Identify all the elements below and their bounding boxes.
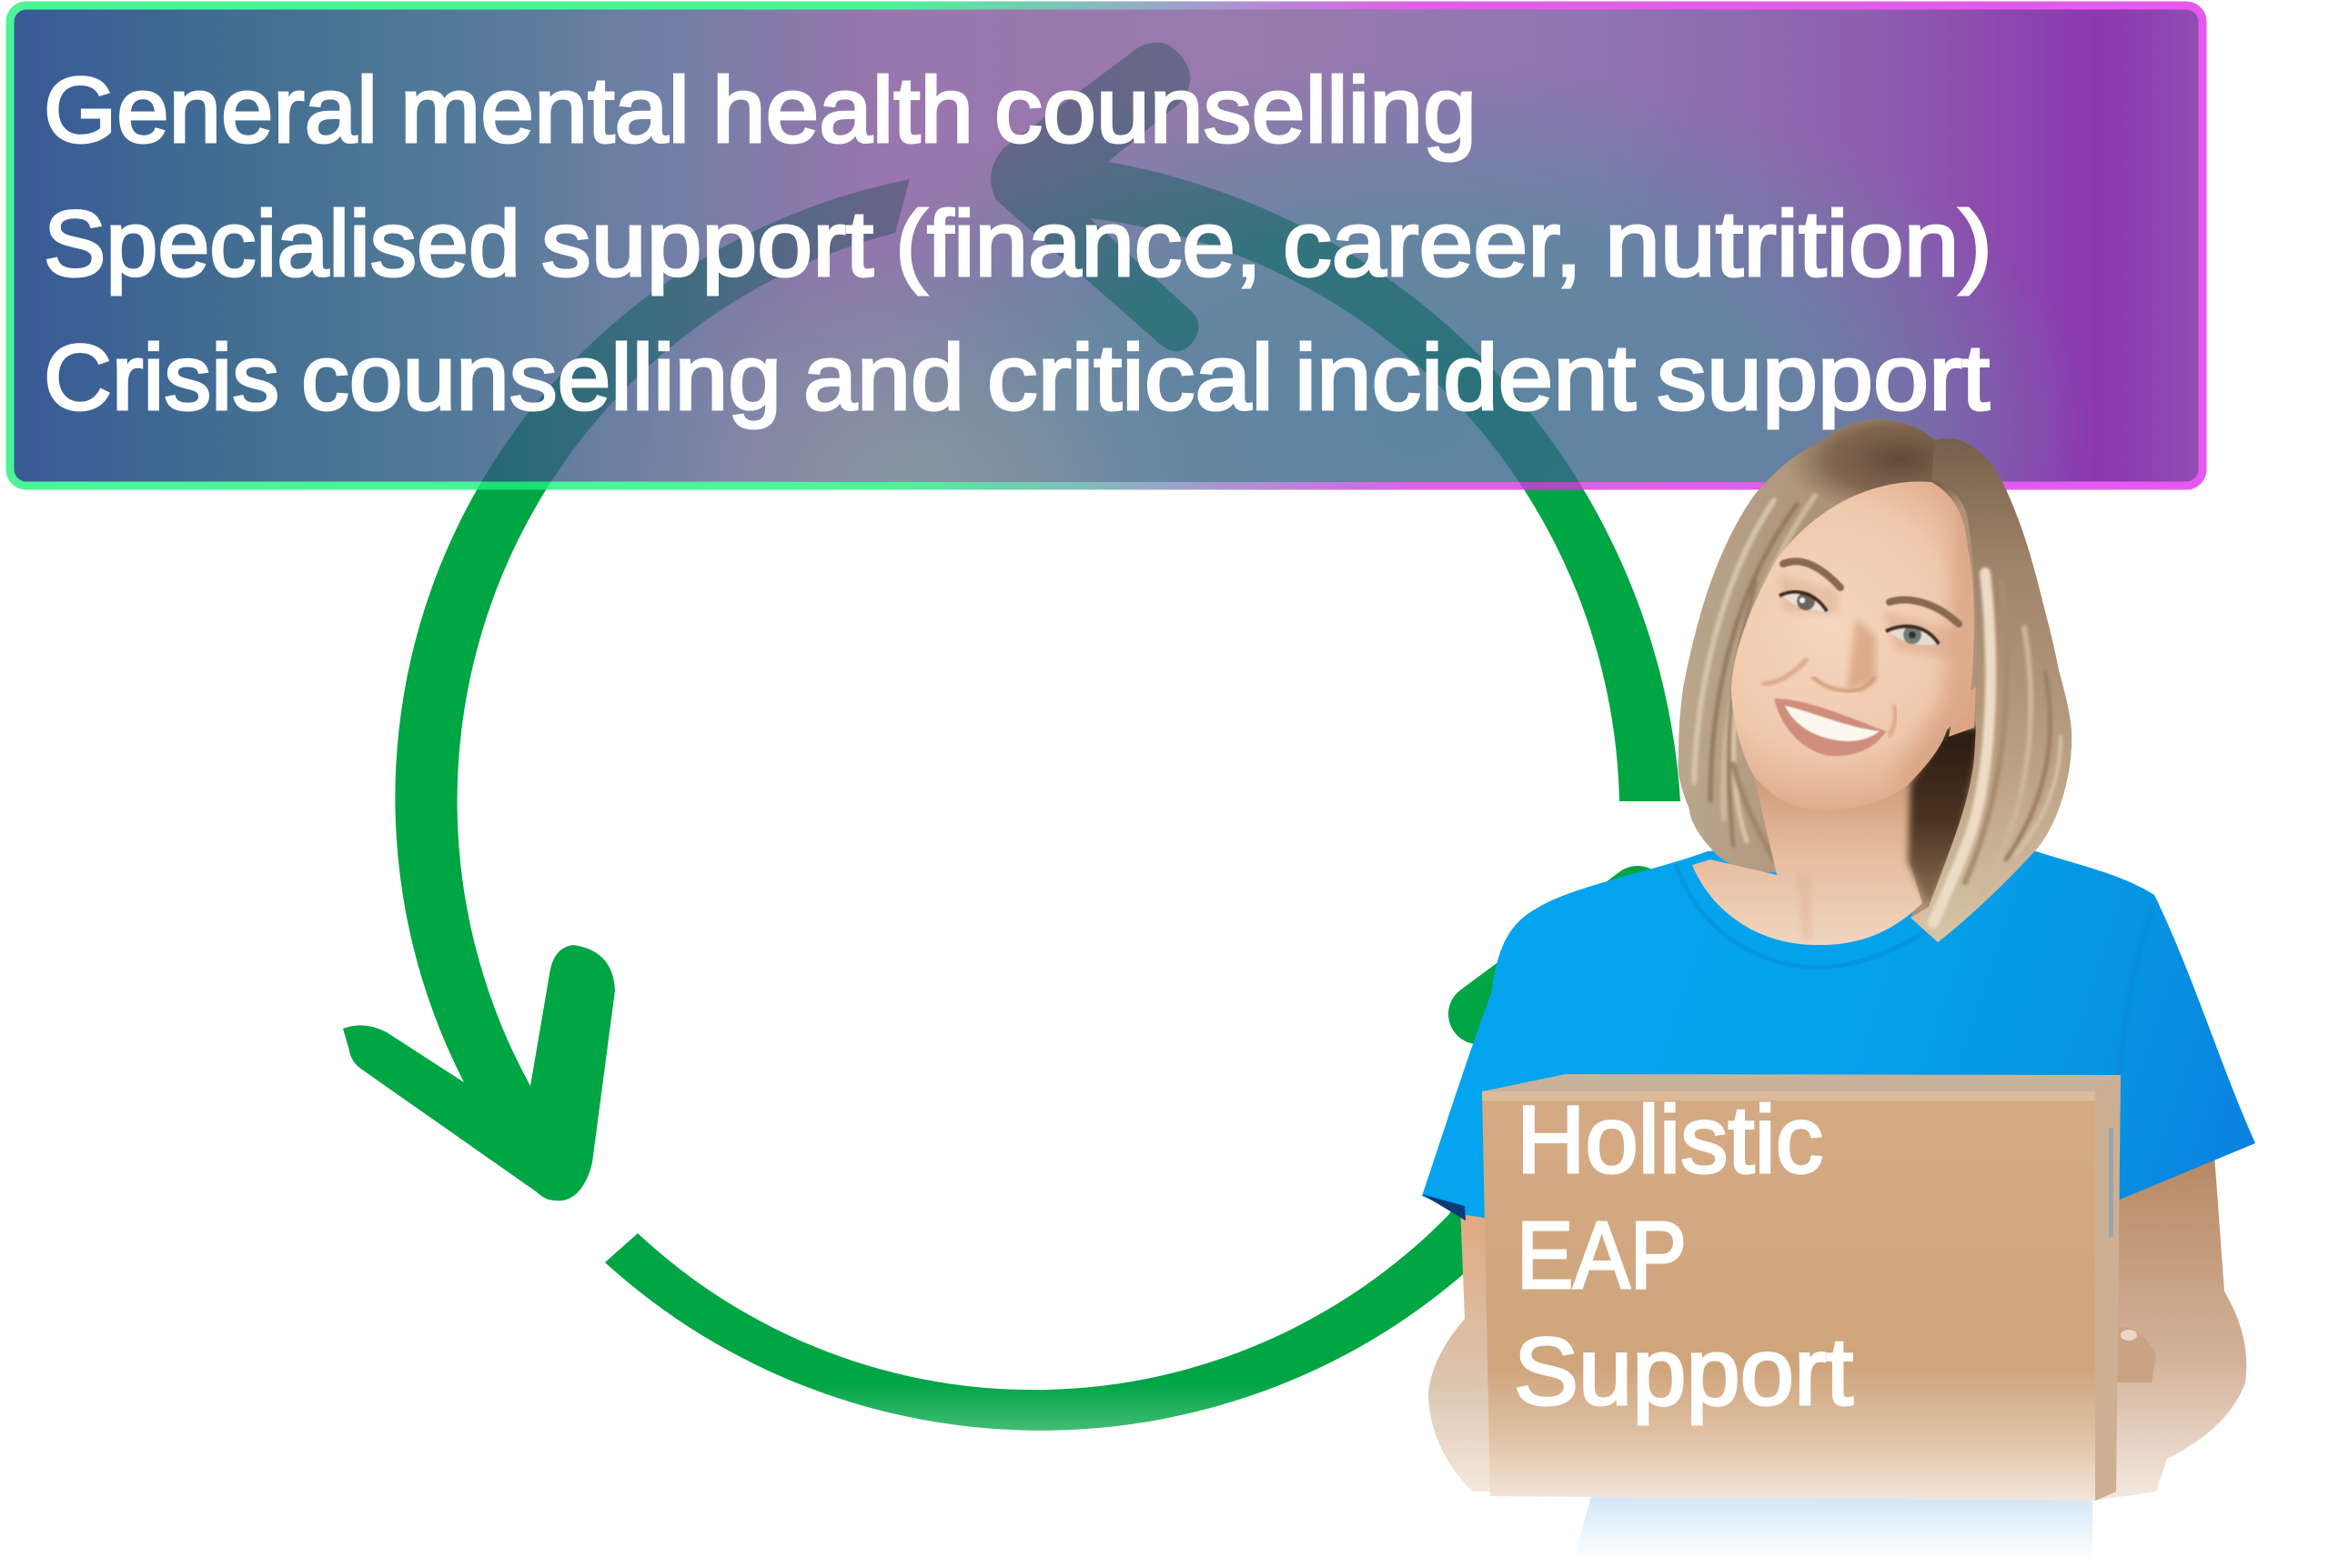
line: specialised support: career, xyxy=(1283,192,1582,296)
nose xyxy=(1813,678,1874,691)
shirt sleeve underside xyxy=(1422,1194,1466,1221)
arrow: top right segment xyxy=(991,43,1680,801)
shirt xyxy=(1422,837,2255,1223)
eye socket shade xyxy=(1884,611,1951,657)
line: crisis counselling: counselling xyxy=(301,326,781,429)
label: Support: Support xyxy=(1514,1319,1853,1425)
label: Holistic: Holistic xyxy=(1517,1087,1823,1193)
hair root shading xyxy=(1794,419,1988,504)
right hair strands xyxy=(1933,573,2061,923)
line: specialised support: (finance, xyxy=(895,192,1262,296)
line: crisis counselling: incident xyxy=(1295,326,1636,429)
shirt seam xyxy=(2120,900,2156,1073)
cardboard box xyxy=(1482,1074,2121,1501)
box top flap xyxy=(1482,1074,2121,1091)
right hand xyxy=(2109,1327,2156,1382)
neck and chest xyxy=(1692,728,1956,945)
hair silhouette xyxy=(1678,419,2072,942)
right arm xyxy=(2092,1155,2246,1501)
face xyxy=(1731,481,1983,809)
line: specialised support xyxy=(44,192,1992,296)
panel: service list background xyxy=(10,5,2203,486)
left forearm xyxy=(1428,1205,1501,1492)
fingernail xyxy=(2121,1330,2137,1341)
line: general counselling: General xyxy=(44,58,378,162)
box side xyxy=(2095,1075,2121,1501)
line: general counselling: health xyxy=(712,58,973,162)
line: specialised support: support xyxy=(541,192,873,296)
nose side shadow xyxy=(1847,618,1876,691)
chest centre shadow xyxy=(1797,873,1812,941)
arrow: left segment xyxy=(343,179,910,1201)
right hair lock xyxy=(1911,438,2072,942)
smile crease xyxy=(1762,658,1808,684)
eye: left xyxy=(1780,592,1827,611)
line: crisis counselling xyxy=(44,326,1990,429)
person holding box xyxy=(1422,403,2255,1560)
line: crisis counselling: Crisis xyxy=(44,326,279,429)
box label xyxy=(1514,1087,1853,1425)
arrow: bottom segment xyxy=(605,1137,1547,1431)
left hair strands xyxy=(1694,496,1815,859)
label: EAP: EAP xyxy=(1517,1202,1687,1309)
box edge shading xyxy=(1482,1091,2095,1101)
under-box clothing xyxy=(1574,1496,2092,1560)
cycle arrows xyxy=(343,43,1680,1431)
line: general counselling: mental xyxy=(400,58,690,162)
line: specialised support: nutrition) xyxy=(1605,192,1992,296)
line: general counselling: counselling xyxy=(994,58,1477,162)
box front xyxy=(1482,1091,2095,1501)
eyebrows xyxy=(1783,561,1959,624)
line: specialised support: Specialised xyxy=(44,192,520,296)
shadow behind jaw xyxy=(1908,728,1981,907)
service list text xyxy=(44,58,1992,429)
line: general counselling xyxy=(44,58,1477,162)
eye: right xyxy=(1886,626,1939,645)
shirt collar xyxy=(1676,864,1956,968)
box side stripe xyxy=(2109,1128,2113,1237)
face right shading xyxy=(1898,517,1974,784)
ear xyxy=(1949,687,1976,737)
mouth xyxy=(1774,699,1886,756)
line: crisis counselling: support xyxy=(1657,326,1990,429)
line: crisis counselling: and xyxy=(803,326,964,429)
arrow: head behind person xyxy=(1478,896,1638,1014)
line: crisis counselling: critical xyxy=(987,326,1274,429)
